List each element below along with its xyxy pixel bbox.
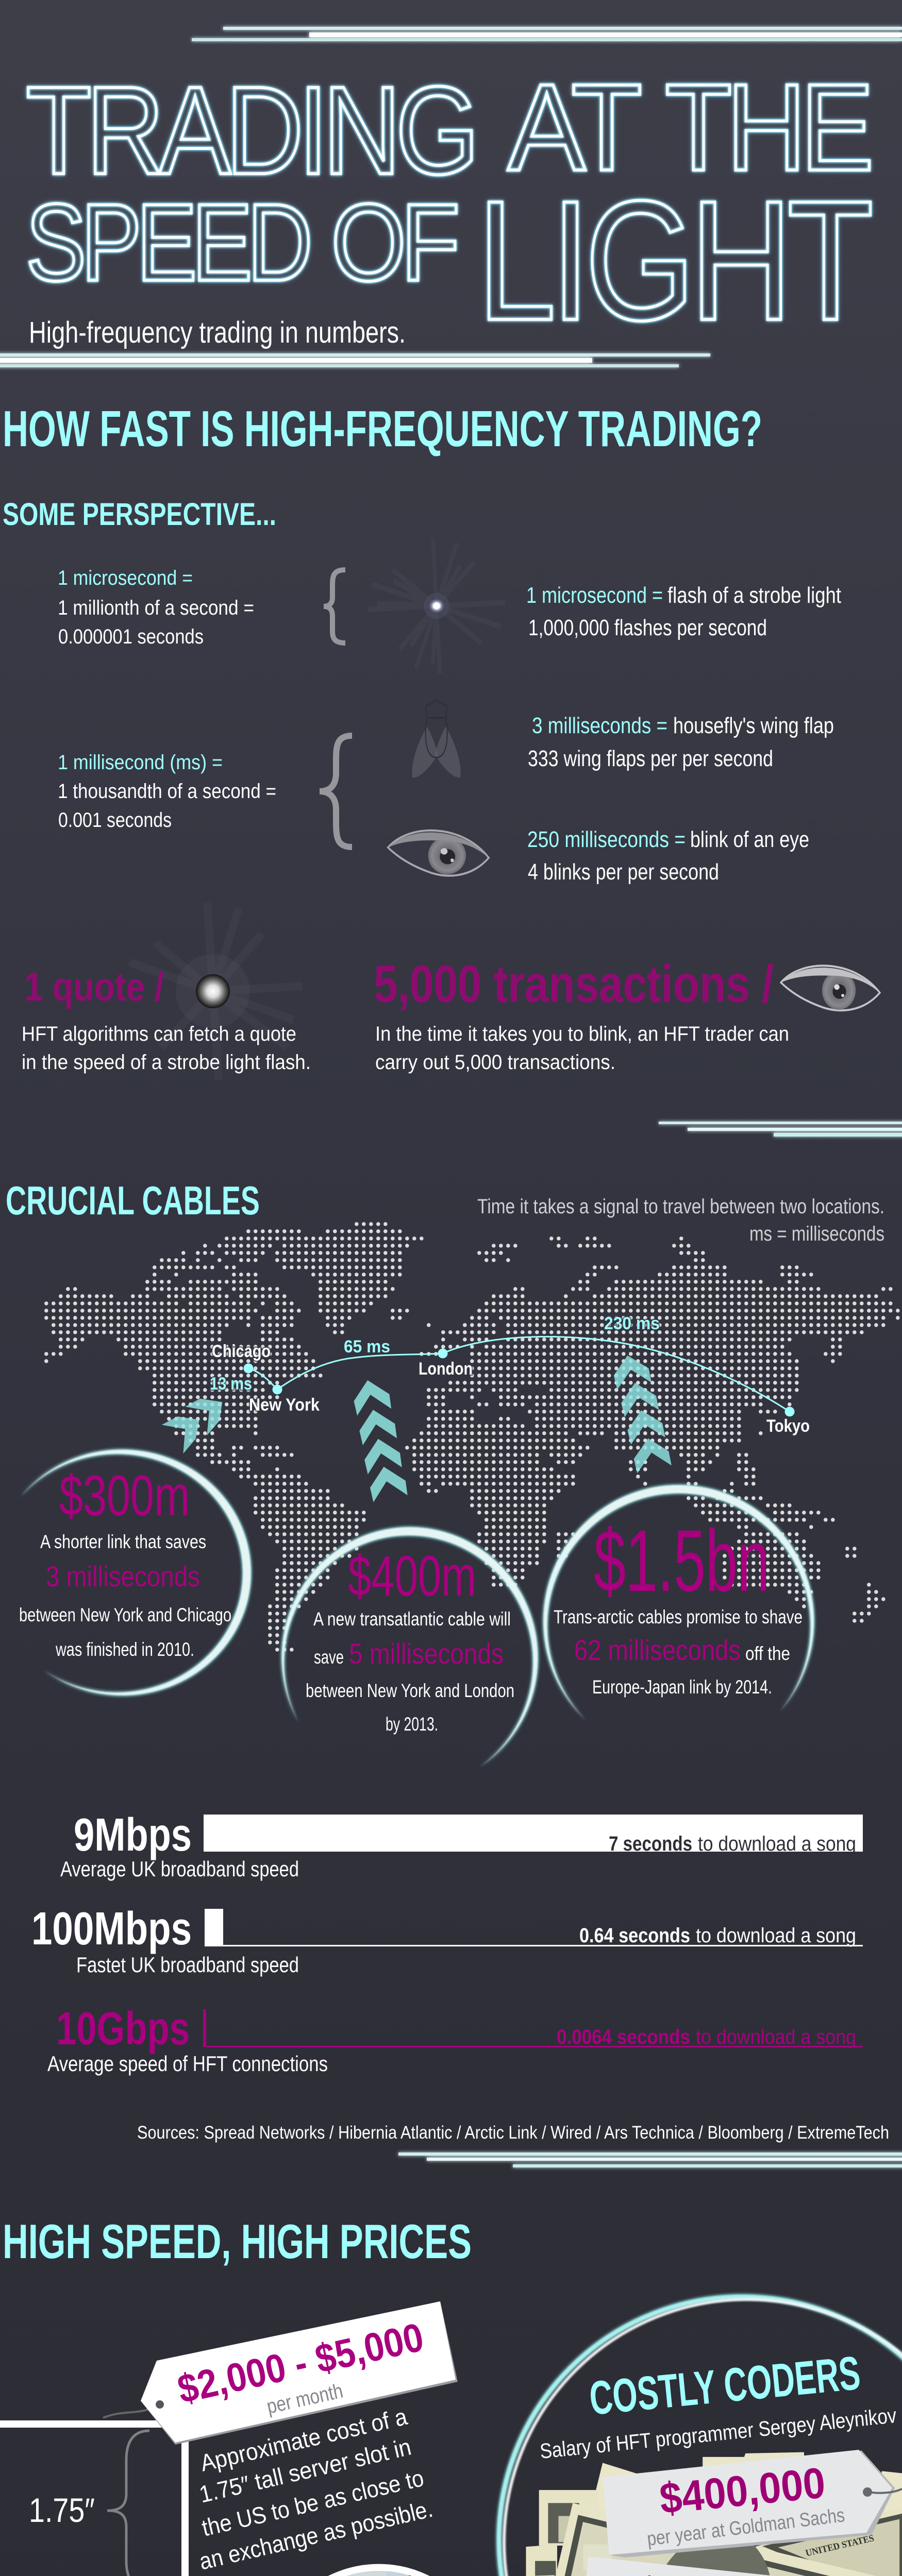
- panel: $400m: 5 milliseconds: [349, 1637, 504, 1670]
- housefly comparison text: housefly's wing flap: [673, 713, 834, 738]
- server slot box: 1.75″: [29, 2491, 95, 2529]
- small brace: [324, 570, 345, 643]
- callout: 1 quote text: in the speed of a strobe light flash.: [22, 1051, 311, 1074]
- strobe comparison text: [526, 583, 841, 640]
- panel: $400m: $400m: [348, 1545, 476, 1608]
- blink comparison text: 4 blinks per per second: [528, 859, 719, 885]
- neon lines before cables: [659, 1122, 902, 1137]
- icon: eye large: [781, 965, 880, 1010]
- bar: 10Gbps: 0.0064 seconds: [557, 2026, 690, 2048]
- title: [26, 58, 871, 356]
- server slot text: the US to be as close to: [199, 2464, 426, 2541]
- panel: $400m: A new transatlantic cable will: [313, 1608, 511, 1630]
- strobe comparison text: flash of a strobe light: [667, 583, 841, 608]
- heading: high speed high prices: HIGH SPEED, HIGH PRICES: [3, 2214, 472, 2268]
- title: TRADING: [26, 61, 474, 200]
- icon: strobe light: [368, 539, 505, 674]
- server slot box: [0, 2424, 185, 2576]
- icon: eye: [388, 831, 489, 876]
- bar: 9Mbps: to download a song: [698, 1833, 856, 1855]
- panel: $1.5bn: Europe-Japan link by 2014.: [592, 1676, 772, 1698]
- neon lines before prices: [398, 2153, 902, 2167]
- server slot text: [197, 2403, 435, 2575]
- callout: 5,000 transactions text: In the time it takes you to blink, an HFT trader can: [375, 1023, 789, 1045]
- price tag: Goldman Sachs salary: per year at Goldman Sachs: [646, 2504, 846, 2550]
- bar: 100Mbps: [31, 1903, 863, 1977]
- bar: 10Gbps: 10Gbps: [56, 2003, 190, 2055]
- top neon lines: [192, 27, 902, 41]
- panel: $400m: [306, 1545, 514, 1735]
- price tag: Goldman Sachs salary: [603, 2450, 902, 2557]
- blink comparison text: 250 milliseconds =: [527, 827, 686, 852]
- city markers: [243, 1349, 795, 1417]
- panel: costly coders money pile: UNITED STATES: [805, 2533, 875, 2558]
- large brace: [320, 736, 352, 847]
- ring: costly coders: [499, 2297, 902, 2576]
- map labels: Tokyo: [766, 1416, 810, 1436]
- definition: millisecond: 1 thousandth of a second =: [58, 780, 276, 803]
- subtitle neon lines: [0, 353, 710, 367]
- bar: 9Mbps: 7 seconds: [609, 1833, 692, 1855]
- bar: 9Mbps: 9Mbps: [74, 1809, 192, 1861]
- panel: $300m: between New York and Chicago: [19, 1604, 231, 1625]
- panel: $1.5bn: [554, 1512, 803, 1698]
- definition: microsecond: 0.000001 seconds: [58, 625, 204, 648]
- panel: $400m: by 2013.: [386, 1714, 438, 1735]
- bar: 100Mbps: 0.64 seconds: [579, 1924, 690, 1947]
- server slot text: 1.75″ tall server slot in: [197, 2433, 413, 2508]
- callout: 1 quote text: HFT algorithms can fetch a quote: [22, 1023, 296, 1045]
- price tag: server slot: per month: [264, 2380, 345, 2418]
- panel: $300m: $300m: [59, 1464, 190, 1528]
- callout: 1 quote strobe: [129, 903, 302, 1080]
- map labels: 230 ms: [604, 1314, 660, 1333]
- panel: costly coders money pile: [517, 2452, 902, 2576]
- map caption: [477, 1195, 884, 1245]
- definition: microsecond: 1 millionth of a second =: [58, 597, 254, 619]
- bar chart: connection speeds: [31, 1809, 863, 2076]
- definition: millisecond: 0.001 seconds: [58, 809, 172, 832]
- heading: some perspective: SOME PERSPECTIVE...: [3, 497, 276, 532]
- strobe comparison text: 1,000,000 flashes per second: [528, 615, 767, 640]
- panel: $400m: save: [314, 1647, 344, 1668]
- definition: microsecond: [58, 567, 254, 648]
- bar: 9Mbps: Average UK broadband speed: [60, 1857, 299, 1881]
- panel: $300m: 3 milliseconds: [46, 1560, 200, 1592]
- housefly comparison text: 3 milliseconds =: [532, 713, 667, 738]
- map labels: [210, 1314, 810, 1436]
- callout: 5,000 transactions headline: 5,000 transactions /: [374, 955, 774, 1013]
- map labels: London: [419, 1359, 473, 1379]
- world map dots: [46, 1224, 898, 1650]
- bar: 10Gbps: Average speed of HFT connections: [47, 2052, 328, 2076]
- server slot text: Approximate cost of a: [198, 2403, 410, 2477]
- callout: 5,000 transactions text: [375, 1023, 789, 1074]
- panel: $1.5bn: 62 milliseconds: [574, 1634, 741, 1666]
- price tag: server slot: [103, 2301, 458, 2445]
- panel: $1.5bn: $1.5bn: [594, 1512, 770, 1610]
- title: OF: [331, 181, 456, 304]
- ring: $400m: [282, 1528, 538, 1767]
- price tag: Teza Technologies salary: [579, 2556, 902, 2576]
- title: THE: [665, 58, 870, 196]
- bar: 100Mbps: to download a song: [696, 1924, 856, 1947]
- bar: 100Mbps: 100Mbps: [31, 1903, 192, 1955]
- panel: $1.5bn: Trans-arctic cables promise to shave: [554, 1606, 803, 1628]
- ring: $1.5bn: [544, 1485, 814, 1721]
- chevrons: transatlantic: [354, 1380, 408, 1502]
- map labels: New York: [249, 1395, 320, 1415]
- cable routes: [248, 1337, 790, 1412]
- title: AT: [508, 58, 640, 196]
- definition: millisecond: 1 millisecond (ms) =: [58, 751, 223, 774]
- bar: 100Mbps: Fastet UK broadband speed: [76, 1953, 299, 1977]
- callout: 5,000 transactions text: carry out 5,000 transactions.: [375, 1051, 615, 1074]
- housefly comparison text: [528, 713, 834, 771]
- price tag: server slot: $2,000 - $5,000: [174, 2314, 427, 2412]
- chevrons: trans-arctic: [614, 1355, 672, 1473]
- bar: 10Gbps: [47, 2003, 863, 2076]
- strobe comparison text: 1 microsecond =: [526, 583, 663, 608]
- panel: $1.5bn: off the: [745, 1643, 790, 1664]
- heading: crucial cables: CRUCIAL CABLES: [6, 1178, 260, 1223]
- callout: 1 quote text: [22, 1023, 311, 1074]
- title: SPEED: [26, 181, 309, 304]
- map labels: Chicago: [212, 1342, 271, 1361]
- blink comparison text: blink of an eye: [690, 827, 809, 852]
- callout: 1 quote headline: 1 quote /: [24, 964, 164, 1009]
- map labels: 65 ms: [344, 1337, 390, 1357]
- panel: $300m: A shorter link that saves: [40, 1531, 206, 1552]
- housefly comparison text: 333 wing flaps per per second: [528, 746, 773, 771]
- panel: $300m: [19, 1464, 231, 1660]
- bar: 9Mbps: [60, 1809, 863, 1881]
- server slot text: an exchange as possible.: [197, 2495, 435, 2575]
- ring: $300m: [21, 1450, 250, 1695]
- definition: microsecond: 1 microsecond =: [58, 567, 193, 589]
- photo: Manhattan apartment building: [328, 2564, 430, 2576]
- price tag: Goldman Sachs salary: $400,000: [657, 2458, 827, 2523]
- definition: millisecond: [58, 751, 276, 832]
- subtitle: High-frequency trading in numbers.: [29, 316, 406, 349]
- panel: $400m: between New York and London: [306, 1680, 514, 1701]
- blink comparison text: [527, 827, 809, 885]
- chevrons: Chicago link: [162, 1399, 222, 1453]
- map labels: 13 ms: [210, 1374, 252, 1394]
- icon: housefly: [412, 700, 461, 777]
- bar: 10Gbps: to download a song: [696, 2026, 856, 2048]
- panel: $300m: was finished in 2010.: [55, 1639, 194, 1660]
